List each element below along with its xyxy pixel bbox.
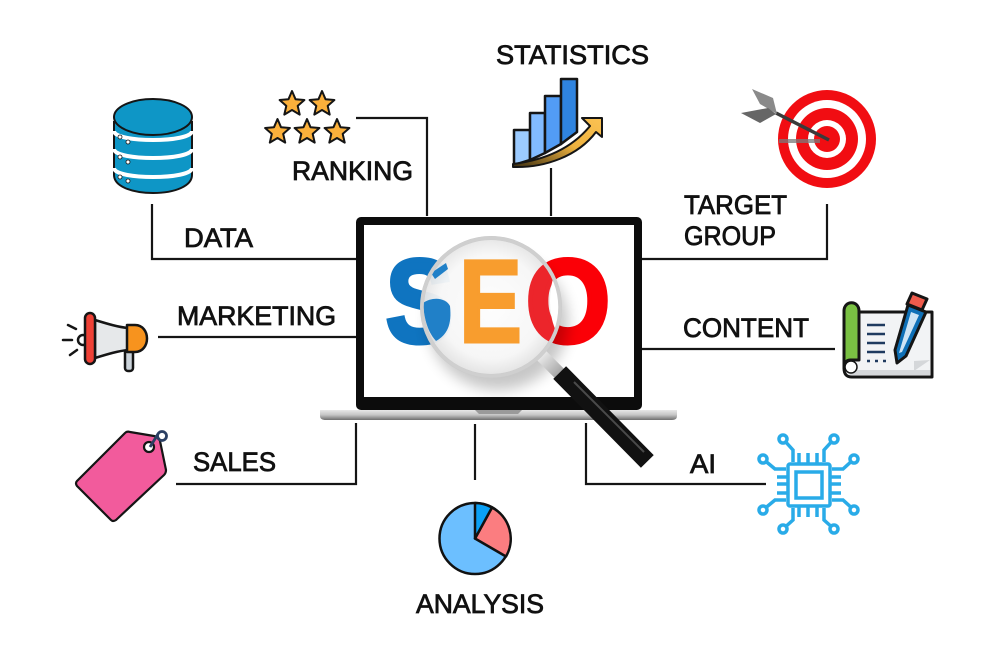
magnified letters: E [459, 236, 522, 368]
SEO lettering: S [386, 236, 453, 368]
label: ai: AI [690, 449, 716, 479]
label: ranking: RANKING [292, 156, 413, 186]
label: target group: TARGET [684, 190, 787, 220]
icon: pie chart [440, 503, 511, 574]
SEO lettering [386, 236, 610, 368]
label: sales: SALES [193, 447, 276, 477]
magnifying glass [422, 236, 644, 455]
icon: rising bar chart [513, 79, 602, 167]
SEO lettering: O [526, 236, 610, 368]
icon: megaphone [63, 313, 147, 371]
magnified letters [424, 259, 558, 344]
icon: price tag [76, 432, 166, 521]
label: target group: GROUP [684, 221, 776, 251]
connector lines [152, 118, 835, 484]
label: content: CONTENT [683, 313, 809, 343]
lens rim [422, 238, 560, 376]
magnified letters: O [526, 236, 610, 368]
label: data: DATA [184, 223, 253, 253]
label: statistics: STATISTICS [496, 40, 649, 70]
label: target group [684, 190, 787, 251]
lens [422, 238, 560, 376]
magnifier shadow [428, 254, 568, 390]
icon: database [114, 99, 192, 193]
label: marketing: MARKETING [177, 301, 336, 331]
icon: scroll with pencil [844, 293, 932, 377]
handle [540, 354, 644, 455]
icon: stars [265, 91, 349, 143]
label: analysis: ANALYSIS [416, 589, 544, 619]
laptop body [320, 217, 677, 420]
icon: chip circuit [759, 435, 858, 533]
icon: target with dart [741, 89, 876, 188]
laptop with SEO magnifier [320, 217, 677, 455]
